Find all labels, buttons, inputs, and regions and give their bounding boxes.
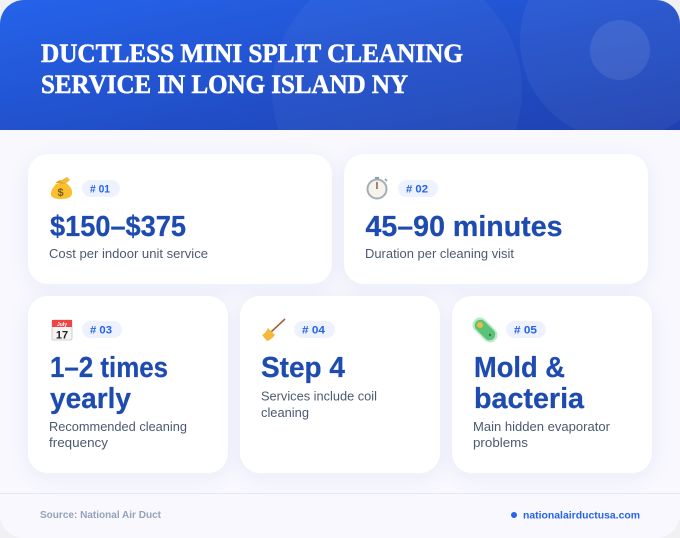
value: $150–$375: [50, 211, 186, 243]
badge #03: [82, 321, 122, 338]
icon: broom: [262, 319, 285, 341]
value: 1–2 times: [50, 352, 168, 384]
panel: card 01 cost: [46, 177, 314, 286]
panel: card 05 mold and bacteria: [452, 296, 652, 473]
badge #05: [506, 321, 546, 338]
badge #01: [82, 180, 120, 197]
label: problems: [473, 436, 528, 450]
icon: money bag: [51, 177, 72, 199]
badge #05: # 05: [514, 324, 537, 336]
icon: calendar: [52, 320, 72, 342]
website link: nationalairductusa.com: [523, 510, 640, 522]
icon: calendar: July: [57, 322, 67, 328]
icon: money bag: $: [58, 187, 64, 199]
value: Step 4: [261, 352, 345, 384]
label: frequency: [49, 436, 109, 450]
panel: card 03 frequency: [28, 296, 228, 473]
label: Main hidden evaporator: [473, 420, 610, 434]
footer: [0, 493, 680, 518]
label: Services include coil: [261, 390, 377, 404]
panel: card 02 duration: [344, 177, 630, 286]
source note: Source: National Air Duct: [40, 510, 162, 521]
badge #01: # 01: [90, 184, 110, 196]
label: [49, 420, 187, 450]
icon: microbe: [477, 322, 491, 336]
label: Duration per cleaning visit: [365, 247, 515, 261]
value: bacteria: [474, 383, 585, 415]
badge #04: [294, 321, 335, 338]
label: Cost per indoor unit service: [49, 247, 208, 261]
title: DUCTLESS MINI SPLIT CLEANING: [41, 38, 463, 68]
label: cleaning: [261, 406, 309, 420]
badge #02: # 02: [406, 184, 428, 196]
value: Mold &: [474, 352, 565, 384]
label: [473, 420, 610, 450]
website link: [511, 511, 640, 518]
value: [50, 352, 168, 415]
value: yearly: [50, 383, 131, 415]
badge #03: # 03: [90, 324, 112, 336]
badge #02: [398, 180, 438, 197]
title: [41, 44, 463, 94]
header banner: [0, 0, 680, 130]
label: [261, 390, 377, 420]
label: Recommended cleaning: [49, 420, 187, 434]
panel: card 04 coil cleaning: [240, 296, 440, 473]
icon: calendar: 17: [56, 330, 68, 342]
value: [476, 356, 584, 408]
value: 45–90 minutes: [366, 211, 562, 243]
icon: stopwatch: [368, 177, 387, 198]
badge #04: # 04: [302, 324, 326, 336]
title: SERVICE IN LONG ISLAND NY: [41, 69, 408, 99]
